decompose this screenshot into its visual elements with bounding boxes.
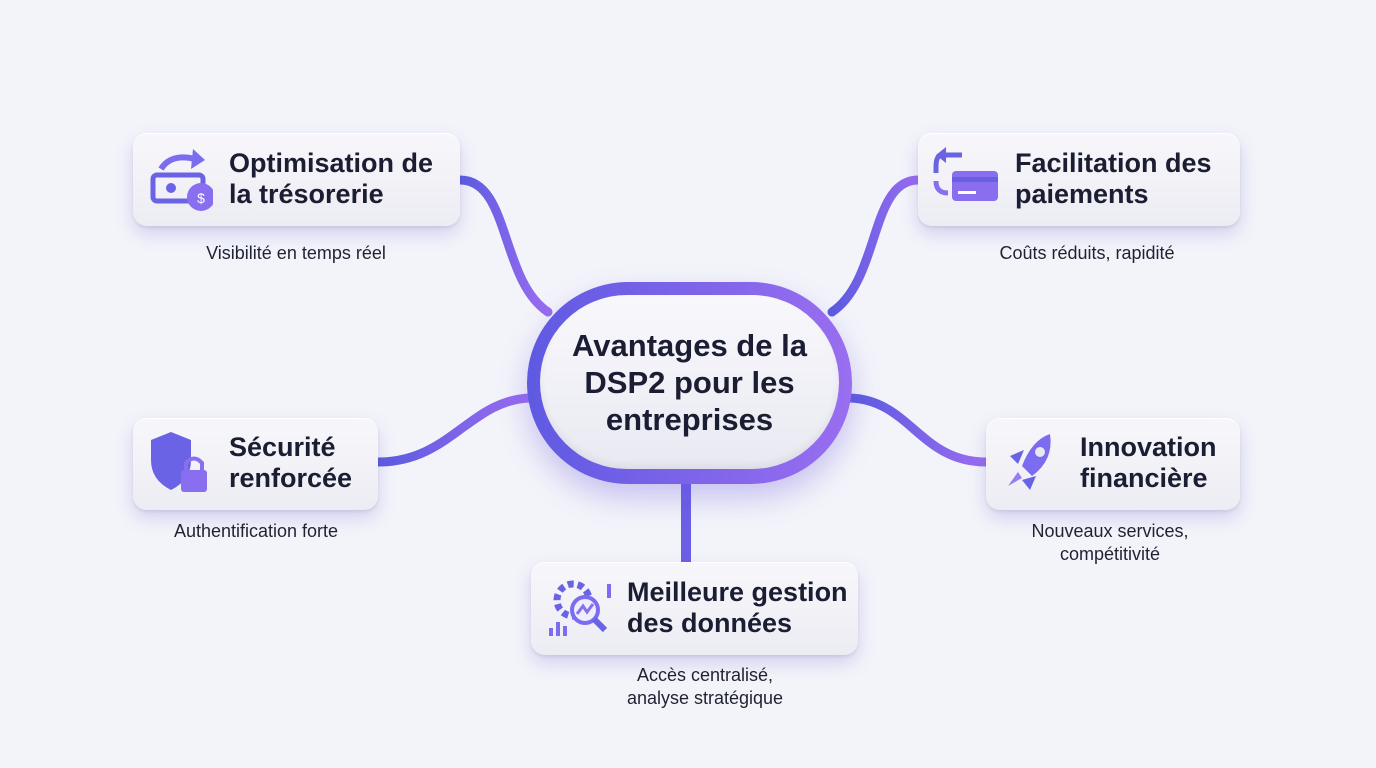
card: innovation [986,418,1240,510]
center title: DSP2 pour les [584,365,795,400]
center title [572,328,808,437]
subtitle: trésorerie: Visibilité en temps réel [206,243,386,263]
subtitle: paiements: Coûts réduits, rapidité [999,243,1175,263]
icon: money: $ [197,190,205,206]
center title: entreprises [606,402,773,437]
subtitle: innovation [1031,521,1189,564]
card: sécurité [133,418,378,510]
icon: money [150,149,213,211]
icon: gear analysis [549,580,611,636]
card: données [531,562,858,655]
card: paiements: paiements [1015,179,1149,209]
subtitle: données: Accès centralisé, [637,665,773,685]
card: trésorerie: la trésorerie [229,179,384,209]
icon: rocket [1008,434,1051,490]
center title: Avantages de la [572,328,807,363]
subtitle: données [627,665,783,708]
card: sécurité: renforcée [229,463,352,493]
card: sécurité: Sécurité [229,432,336,462]
card: trésorerie: Optimisation de [229,148,433,178]
card: innovation: Innovation [1080,432,1216,462]
card: données: Meilleure gestion [627,577,848,607]
icon: card [934,147,998,201]
icon: shield lock [151,432,207,492]
card: paiements: Facilitation des [1015,148,1212,178]
card: trésorerie [133,133,460,226]
subtitle: innovation: compétitivité [1060,544,1160,564]
subtitle: innovation: Nouveaux services, [1031,521,1189,541]
center node [527,282,852,484]
card: paiements [918,133,1240,226]
subtitle: données: analyse stratégique [627,688,783,708]
card: données: des données [627,608,792,638]
card: innovation: financière [1080,463,1208,493]
subtitle: sécurité: Authentification forte [174,521,338,541]
